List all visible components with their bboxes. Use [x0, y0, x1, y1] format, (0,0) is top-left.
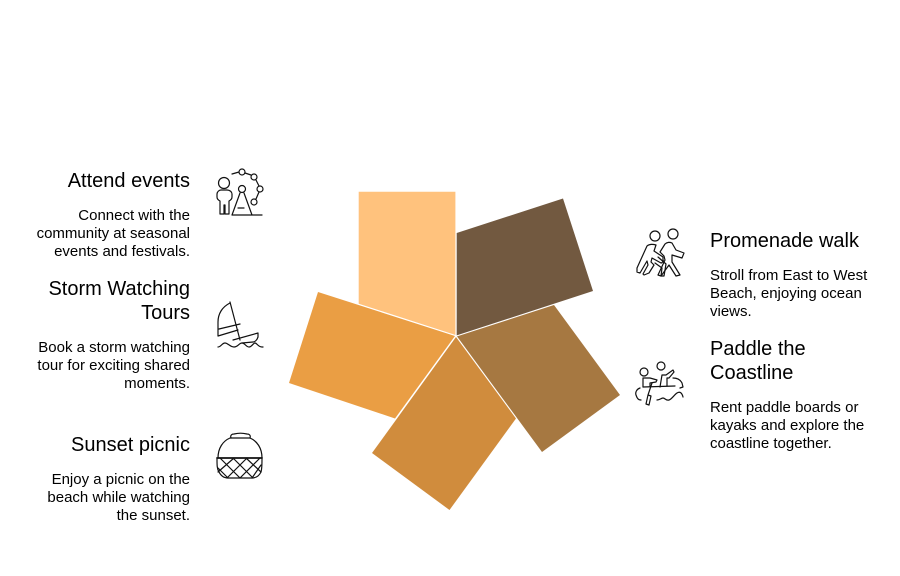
text: Storm Watching Tours [37, 278, 190, 392]
text: Attend events: Connect with the [78, 207, 190, 224]
text: Paddle the Coastline: kayaks and explore the [710, 417, 864, 434]
text: Storm Watching Tours: Storm Watching [48, 278, 190, 300]
text: Sunset picnic: Sunset picnic [71, 434, 190, 456]
text: Storm Watching Tours: moments. [124, 375, 190, 392]
text: Attend events: events and festivals. [54, 243, 190, 260]
text: Storm Watching Tours: Tours [141, 302, 190, 324]
text: Attend events: community at seasonal [37, 225, 190, 242]
text: Promenade walk: Promenade walk [710, 230, 859, 252]
text: Promenade walk: views. [710, 303, 752, 320]
text: Sunset picnic: Enjoy a picnic on the [52, 471, 190, 488]
text: Storm Watching Tours: tour for exciting shared [37, 357, 190, 374]
text: Storm Watching Tours: Book a storm watching [38, 339, 190, 356]
text: Paddle the Coastline: Coastline [710, 362, 793, 384]
text: Sunset picnic: beach while watching [47, 489, 190, 506]
text: Promenade walk [710, 230, 868, 320]
text: Promenade walk: Beach, enjoying ocean [710, 285, 862, 302]
text: Promenade walk: Stroll from East to West [710, 267, 867, 284]
text: Sunset picnic [47, 434, 190, 524]
text: Paddle the Coastline: Paddle the [710, 338, 806, 360]
text: Sunset picnic: the sunset. [117, 507, 190, 524]
text: Attend events [37, 170, 190, 260]
text: Paddle the Coastline: Rent paddle boards or [710, 399, 858, 416]
text: Paddle the Coastline [710, 338, 864, 452]
text: Paddle the Coastline: coastline together. [710, 435, 832, 452]
text: Attend events: Attend events [68, 170, 190, 192]
